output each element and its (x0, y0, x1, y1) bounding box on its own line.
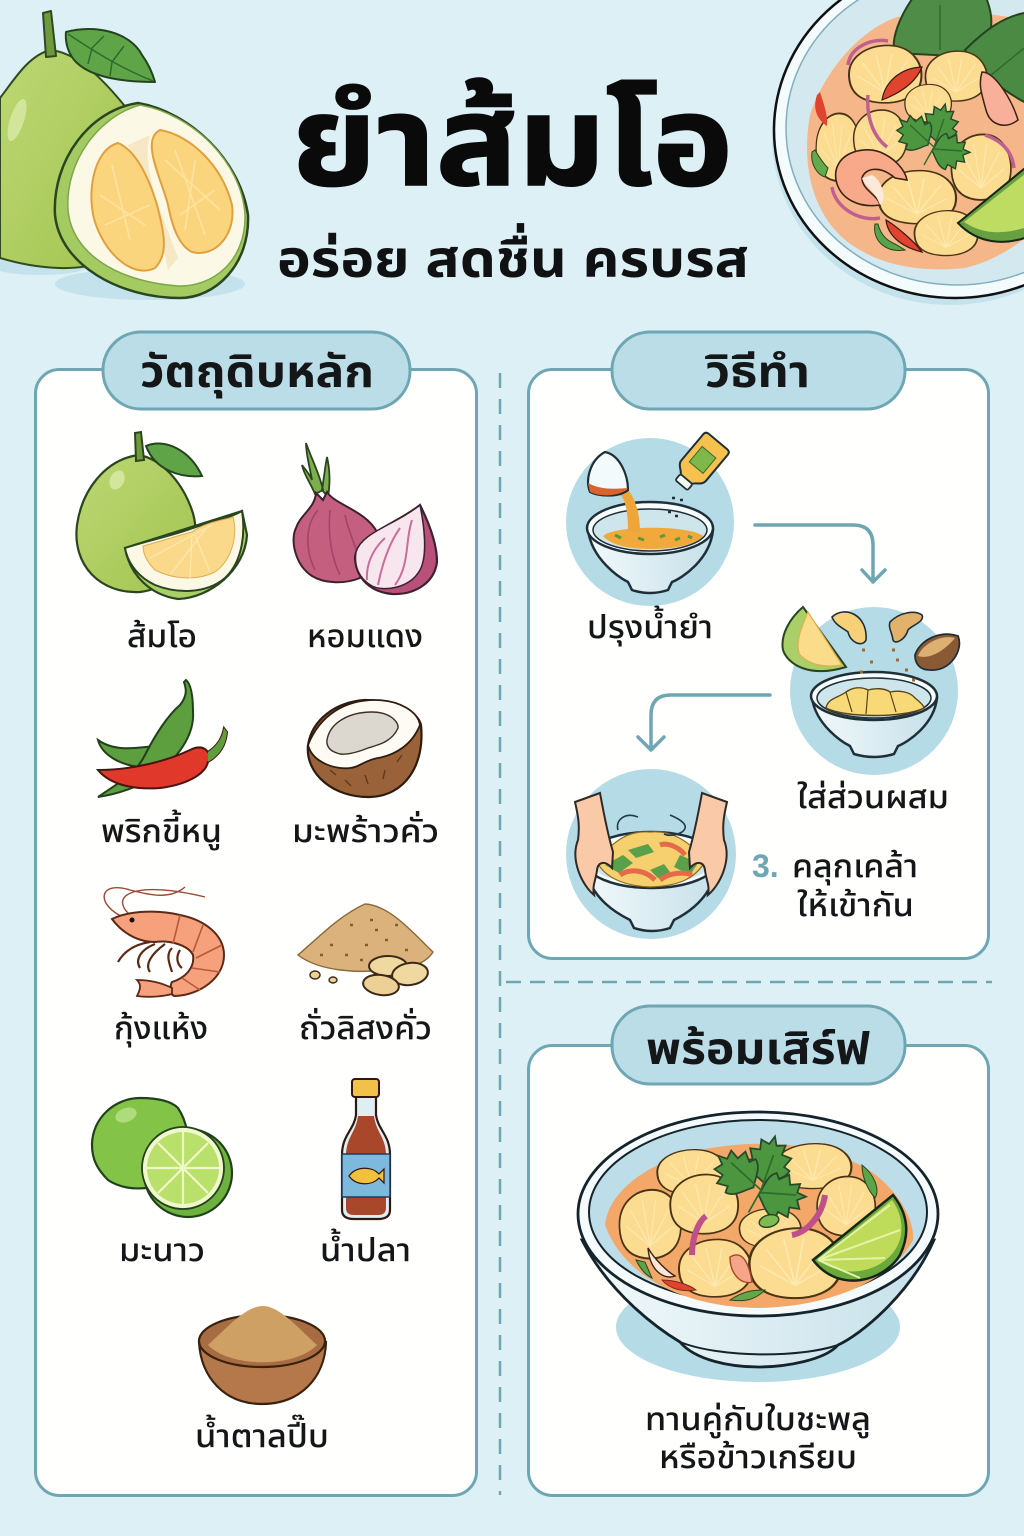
heading pill: ingredients: วัตถุดิบหลัก (140, 348, 374, 399)
serving note (645, 1401, 871, 1475)
dashed column divider (499, 373, 501, 1495)
heading pill: ready to serve: พร้อมเสิร์ฟ (646, 1025, 870, 1074)
dashed row divider (506, 981, 992, 983)
step 2: add ingredients: ใส่ส่วนผสม (797, 779, 949, 815)
ingredient: dried shrimp (104, 887, 224, 1047)
heading pill: ingredients (103, 332, 410, 409)
step 1: mix dressing (566, 431, 734, 646)
ingredient: dried shrimp: กุ้งแห้ง (114, 1010, 208, 1047)
ingredient: shallot: หอมแดง (307, 618, 423, 654)
ingredient: roasted peanuts (298, 904, 433, 1046)
step 3 caption: ให้เข้ากัน (797, 887, 914, 923)
step 1: mix dressing: ปรุงน้ำยำ (587, 605, 713, 646)
ingredient: lime: มะนาว (119, 1232, 205, 1268)
ingredient: palm sugar (195, 1306, 329, 1454)
illustration: serving bowl (578, 1112, 938, 1382)
illustration: pomelo whole and halved (0, 11, 248, 300)
ingredient: shallot (294, 443, 437, 654)
ingredient: fish sauce (320, 1079, 411, 1268)
step 3 caption: คลุกเคล้า (792, 848, 918, 885)
heading pill: method: วิธีทำ (705, 348, 810, 397)
ingredient: fish sauce: น้ำปลา (320, 1228, 411, 1268)
serving note: ทานคู่กับใบชะพลู (645, 1401, 871, 1439)
panel: main ingredients (36, 332, 476, 1496)
ingredient: lime (92, 1098, 232, 1268)
ingredient: chili: พริกขี้หนู (101, 809, 222, 851)
subtitle: อร่อย สดชื่น ครบรส (277, 223, 749, 289)
heading pill: ready to serve (612, 1006, 905, 1084)
serving note: หรือข้าวเกรียบ (659, 1439, 857, 1475)
ingredient: roasted peanuts: ถั่วลิสงคั่ว (299, 1008, 432, 1046)
ingredient: pomelo (76, 432, 247, 654)
panel: method (528, 332, 988, 958)
ingredient: coconut: มะพร้าวคั่ว (292, 811, 439, 849)
ingredient: pomelo: ส้มโอ (127, 618, 197, 654)
ingredient: palm sugar: น้ำตาลปี๊บ (195, 1414, 329, 1454)
arrow: step 1 to step 2 (755, 525, 885, 582)
ingredient: chili (98, 680, 227, 851)
ingredient: coconut (292, 700, 439, 849)
panel: ready to serve (528, 1006, 988, 1496)
arrow: step 2 to step 3 (638, 695, 770, 750)
title: ยำส้มโอ (292, 71, 733, 212)
illustration: plate of pomelo salad (772, 0, 1024, 305)
step 2: add ingredients (782, 607, 959, 815)
step 3 caption (792, 848, 918, 923)
heading pill: method (612, 332, 905, 409)
step 3 number: 3. (752, 848, 779, 884)
step 3: toss together (566, 769, 736, 939)
